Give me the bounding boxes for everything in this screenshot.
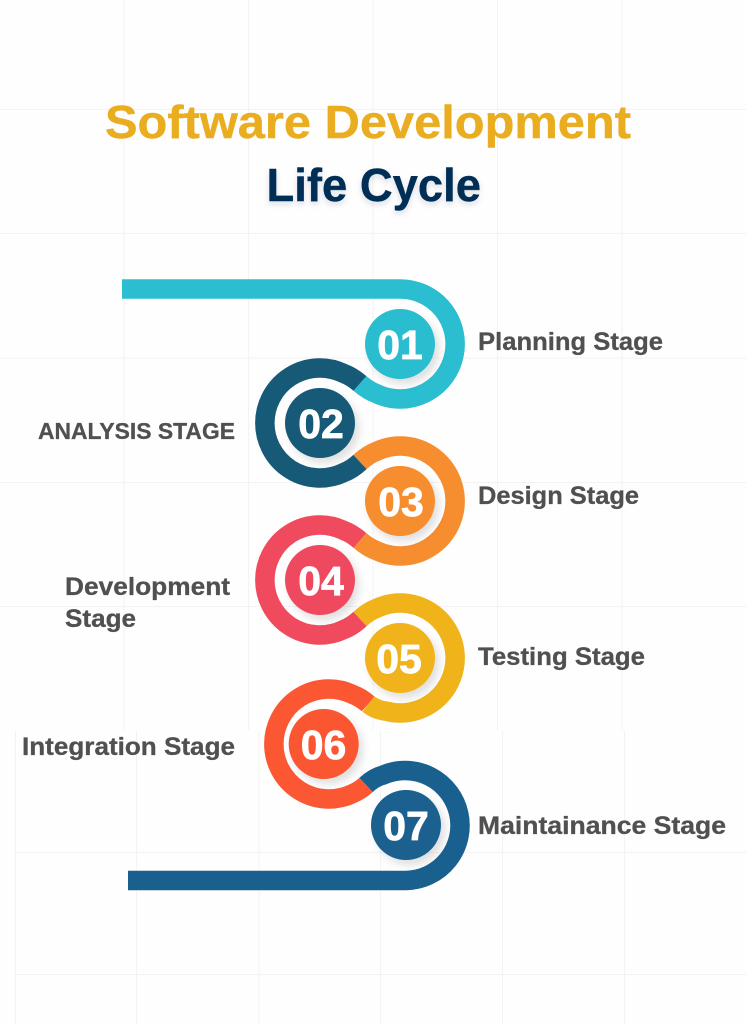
stage 07 ring bbox=[128, 771, 460, 880]
stage 04 ring bbox=[265, 525, 360, 635]
badge 04: 04 bbox=[298, 558, 344, 604]
stage 06 ring bbox=[274, 689, 368, 799]
label: development stage: Stage bbox=[65, 605, 136, 633]
badge 07 bbox=[371, 790, 441, 860]
badge 02 bbox=[285, 388, 355, 458]
stage 03 ring bbox=[360, 446, 455, 556]
stage 02 ring bbox=[265, 368, 360, 478]
badge 05: 05 bbox=[376, 636, 422, 682]
label: development stage: Development bbox=[65, 573, 231, 601]
label: integration stage: Integration Stage bbox=[22, 733, 235, 761]
label: testing stage: Testing Stage bbox=[478, 643, 645, 671]
badge 04 bbox=[285, 545, 355, 615]
stage 05 ring bbox=[360, 603, 455, 713]
badge 01 bbox=[365, 309, 435, 379]
label: maintainance stage: Maintainance Stage bbox=[478, 812, 726, 840]
label: development stage bbox=[65, 573, 231, 633]
stage 01 ring bbox=[122, 289, 455, 399]
badge 01: 01 bbox=[377, 322, 423, 368]
badge 06: 06 bbox=[301, 722, 346, 768]
title line 2: Life Cycle bbox=[266, 159, 481, 211]
badge 02: 02 bbox=[298, 401, 344, 447]
badge 07: 07 bbox=[383, 803, 429, 849]
label: planning stage: Planning Stage bbox=[478, 328, 663, 356]
label: analysis stage: ANALYSIS STAGE bbox=[38, 418, 235, 444]
badge 03: 03 bbox=[378, 479, 424, 525]
badge 03 bbox=[365, 466, 435, 536]
title line 1: Software Development bbox=[105, 96, 631, 148]
badge 06 bbox=[289, 709, 359, 779]
title bbox=[105, 96, 631, 211]
badge 05 bbox=[365, 623, 435, 693]
label: design stage: Design Stage bbox=[478, 482, 639, 510]
